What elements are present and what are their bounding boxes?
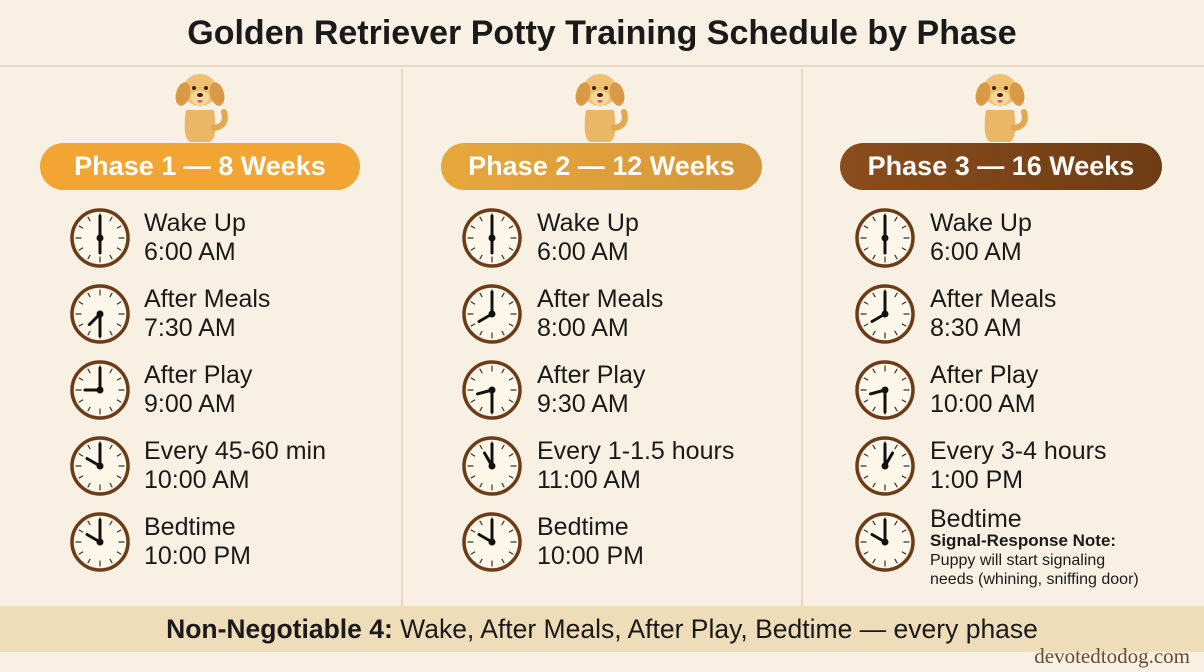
icon: puppy phase 1	[173, 74, 227, 142]
schedule column 2: 11:00 AM	[537, 466, 641, 494]
schedule column 3	[930, 209, 1139, 588]
pill: phase 3	[840, 143, 1162, 190]
schedule column 1: 10:00 PM	[144, 542, 251, 570]
icon: puppy phase 3	[973, 74, 1027, 142]
schedule column 2: 9:30 AM	[537, 390, 629, 418]
callout: signal-response note: Signal-Response Note:	[930, 531, 1116, 550]
clocks column 1	[72, 210, 128, 570]
schedule column 3: Wake Up	[930, 209, 1032, 237]
title: Golden Retriever Potty Training Schedule by Phase	[187, 14, 1017, 52]
schedule column 1: Bedtime	[144, 513, 236, 541]
schedule column 3: After Meals	[930, 285, 1056, 313]
callout: signal-response note: needs (whining, sniffing door)	[930, 571, 1139, 588]
watermark: devotedtodog.com	[1034, 644, 1190, 668]
pill: phase 2: Phase 2 — 12 Weeks	[468, 151, 735, 181]
schedule column 3: 6:00 AM	[930, 238, 1022, 266]
schedule column 3: 8:30 AM	[930, 314, 1022, 342]
schedule column 1: Wake Up	[144, 209, 246, 237]
schedule column 1: After Meals	[144, 285, 270, 313]
schedule column 1: 9:00 AM	[144, 390, 236, 418]
clocks column 2	[464, 210, 520, 570]
schedule column 2: After Meals	[537, 285, 663, 313]
schedule column 3: 10:00 AM	[930, 390, 1036, 418]
schedule column 2: Bedtime	[537, 513, 629, 541]
bottom banner: Non-Negotiable 4: Wake, After Meals, After Play, Bedtime — every phase	[166, 614, 1038, 644]
schedule column 2: 6:00 AM	[537, 238, 629, 266]
schedule column 2	[537, 209, 734, 570]
schedule column 2: 10:00 PM	[537, 542, 644, 570]
schedule column 2: 8:00 AM	[537, 314, 629, 342]
pill: phase 3: Phase 3 — 16 Weeks	[868, 151, 1134, 181]
schedule column 2: Wake Up	[537, 209, 639, 237]
schedule column 3: Bedtime	[930, 505, 1022, 533]
schedule column 3: 1:00 PM	[930, 466, 1023, 494]
clocks column 3	[857, 210, 913, 570]
schedule column 1: Every 45-60 min	[144, 437, 326, 465]
schedule column 1: 6:00 AM	[144, 238, 236, 266]
schedule column 1: 7:30 AM	[144, 314, 236, 342]
schedule column 1	[144, 209, 326, 570]
bottom banner	[0, 606, 1204, 652]
schedule column 2: Every 1-1.5 hours	[537, 437, 734, 465]
callout: signal-response note	[930, 531, 1139, 588]
icon: puppy phase 2	[573, 74, 627, 142]
schedule column 1: 10:00 AM	[144, 466, 250, 494]
pill: phase 1: Phase 1 — 8 Weeks	[74, 151, 326, 181]
schedule column 3: Every 3-4 hours	[930, 437, 1106, 465]
title	[0, 0, 1204, 67]
schedule column 3: After Play	[930, 361, 1038, 389]
pill: phase 1	[40, 143, 360, 190]
pill: phase 2	[441, 143, 762, 190]
schedule column 1: After Play	[144, 361, 252, 389]
callout: signal-response note: Puppy will start signaling	[930, 552, 1105, 569]
schedule column 2: After Play	[537, 361, 645, 389]
